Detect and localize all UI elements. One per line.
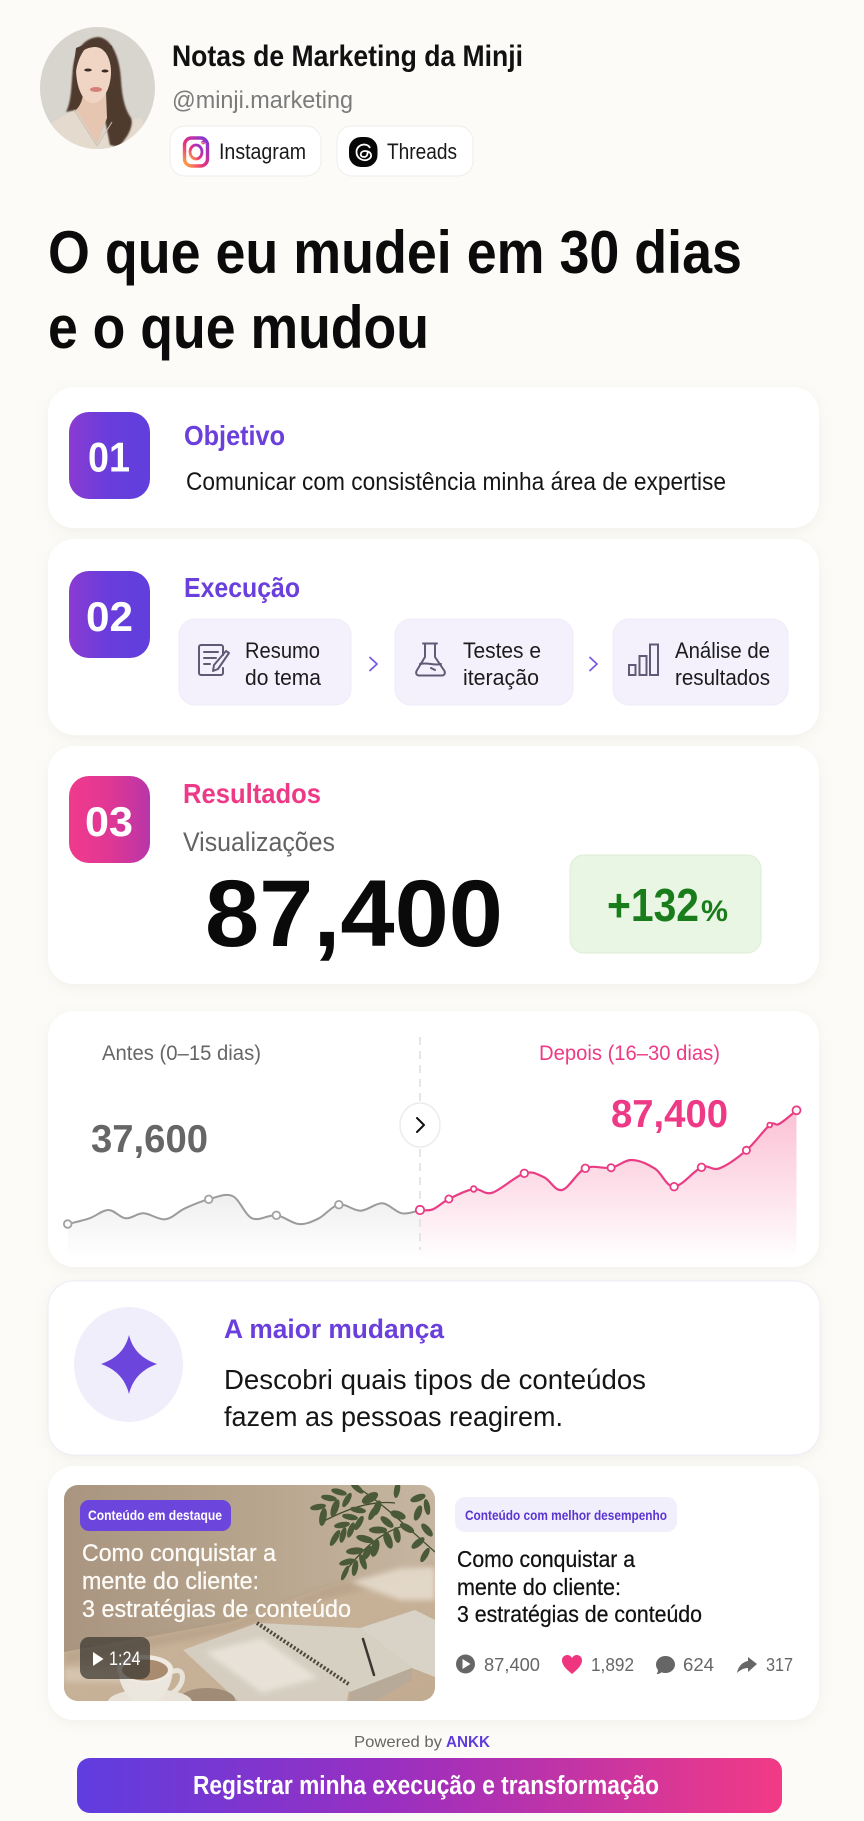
duration chip: [80, 1637, 150, 1679]
before area: [68, 1195, 420, 1258]
label: melhor desempenho: [455, 1497, 677, 1532]
divider: [419, 1037, 421, 1250]
call to action button: Registrar minha execução e transformação: [193, 1772, 659, 1800]
powered by: ANKK: [446, 1734, 490, 1751]
icon: note: [199, 645, 229, 675]
growth badge: [570, 855, 761, 953]
heading: execução: Execução: [184, 572, 300, 603]
step: análise de resultados: Análise de: [675, 638, 770, 663]
heading: resultados: Resultados: [183, 778, 321, 809]
after area: [420, 1110, 796, 1258]
step: análise de resultados: [613, 619, 788, 705]
label: visualizações: Visualizações: [183, 827, 335, 857]
panel: resultados: [48, 746, 819, 984]
stat: comments: [656, 1654, 714, 1675]
heading: a maior mudança: A maior mudança: [224, 1314, 445, 1344]
insight text: Descobri quais tipos de conteúdos: [224, 1364, 646, 1395]
arrow: [590, 658, 597, 670]
transition arrow: [400, 1103, 440, 1147]
arrow: [370, 658, 377, 670]
stat: comments: 624: [683, 1654, 714, 1675]
call to action button: [77, 1758, 782, 1813]
content title: Como conquistar a: [457, 1546, 635, 1572]
growth badge: %: [701, 895, 728, 928]
title: O que eu mudei em 30 dias: [48, 219, 742, 286]
before line: [64, 1195, 420, 1228]
badge 03: [69, 776, 150, 863]
avatar photo: [40, 27, 155, 149]
stat: shares: [737, 1654, 793, 1675]
badge 02: [69, 571, 150, 658]
stat: shares: 317: [766, 1654, 793, 1675]
icon: bars: [629, 644, 658, 675]
badge 01: [69, 412, 150, 499]
content title: mente do cliente:: [457, 1574, 621, 1600]
step: testes e iteração: [395, 619, 573, 705]
value: antes: 37,600: [91, 1118, 208, 1161]
icon: threads: [349, 137, 378, 167]
title: e o que mudou: [48, 294, 429, 361]
label: melhor desempenho: Conteúdo com melhor desempenho: [465, 1507, 667, 1523]
step: análise de resultados: resultados: [675, 665, 770, 690]
stat: views: 87,400: [484, 1654, 540, 1675]
powered by: Powered by: [354, 1734, 442, 1751]
thumbnail title: mente do cliente:: [82, 1568, 259, 1595]
stat: likes: [562, 1654, 634, 1675]
thumbnail title: [82, 1540, 351, 1623]
step: testes e iteração: Testes e: [463, 638, 541, 663]
handle: @minji.marketing: [172, 87, 353, 114]
panel: before/after chart: [48, 1011, 819, 1267]
step: resumo do tema: Resumo: [245, 638, 320, 663]
label: conteúdo em destaque: Conteúdo em destaque: [88, 1507, 222, 1523]
insight text: fazem as pessoas reagirem.: [224, 1401, 563, 1432]
icon: flask: [416, 644, 445, 676]
content title: [457, 1546, 702, 1627]
thumbnail title: Como conquistar a: [82, 1540, 277, 1567]
profile header: [38, 25, 523, 176]
panel: top content: [48, 1466, 819, 1720]
panel: objetivo: [48, 387, 819, 528]
label: antes: Antes (0–15 dias): [102, 1042, 261, 1065]
panel: execução: [48, 539, 819, 735]
badge 02: 02: [86, 593, 133, 640]
badge 03: 03: [85, 798, 133, 845]
stats row: [456, 1654, 793, 1675]
step: resumo do tema: [179, 619, 351, 705]
after line: [416, 1106, 800, 1214]
objective text: Comunicar com consistência minha área de expertise: [186, 468, 726, 496]
instagram pill: Instagram: [219, 139, 306, 164]
insight text: [224, 1364, 646, 1432]
step: resumo do tema: do tema: [245, 665, 322, 690]
badge 01: 01: [88, 434, 130, 480]
value: depois: 87,400: [611, 1093, 728, 1136]
heading: objetivo: Objetivo: [184, 420, 285, 451]
duration chip: 1:24: [109, 1649, 141, 1670]
notebook: [360, 1610, 435, 1677]
stat: likes: 1,892: [591, 1654, 634, 1675]
plant: [326, 1490, 435, 1568]
step: testes e iteração: iteração: [463, 665, 539, 690]
icon: sparkle: [74, 1307, 183, 1422]
growth badge: +132: [607, 879, 699, 931]
stat: views: [456, 1654, 540, 1675]
content title: 3 estratégias de conteúdo: [457, 1601, 702, 1627]
thumbnail title: 3 estratégias de conteúdo: [82, 1596, 351, 1623]
threads pill: [337, 126, 473, 176]
label: depois: Depois (16–30 dias): [539, 1042, 720, 1065]
video thumbnail: [64, 1481, 435, 1715]
label: conteúdo em destaque: [80, 1500, 231, 1531]
big number: 87,400: [205, 861, 503, 967]
title: [48, 219, 742, 361]
powered by: [354, 1734, 490, 1751]
threads pill: Threads: [387, 139, 457, 164]
table surface: [64, 1562, 435, 1701]
panel: a maior mudança: [48, 1281, 820, 1455]
saucers and cup: [183, 1688, 235, 1701]
instagram pill: [170, 126, 321, 176]
icon: instagram: [184, 138, 208, 166]
channel name: Notas de Marketing da Minji: [172, 40, 523, 73]
